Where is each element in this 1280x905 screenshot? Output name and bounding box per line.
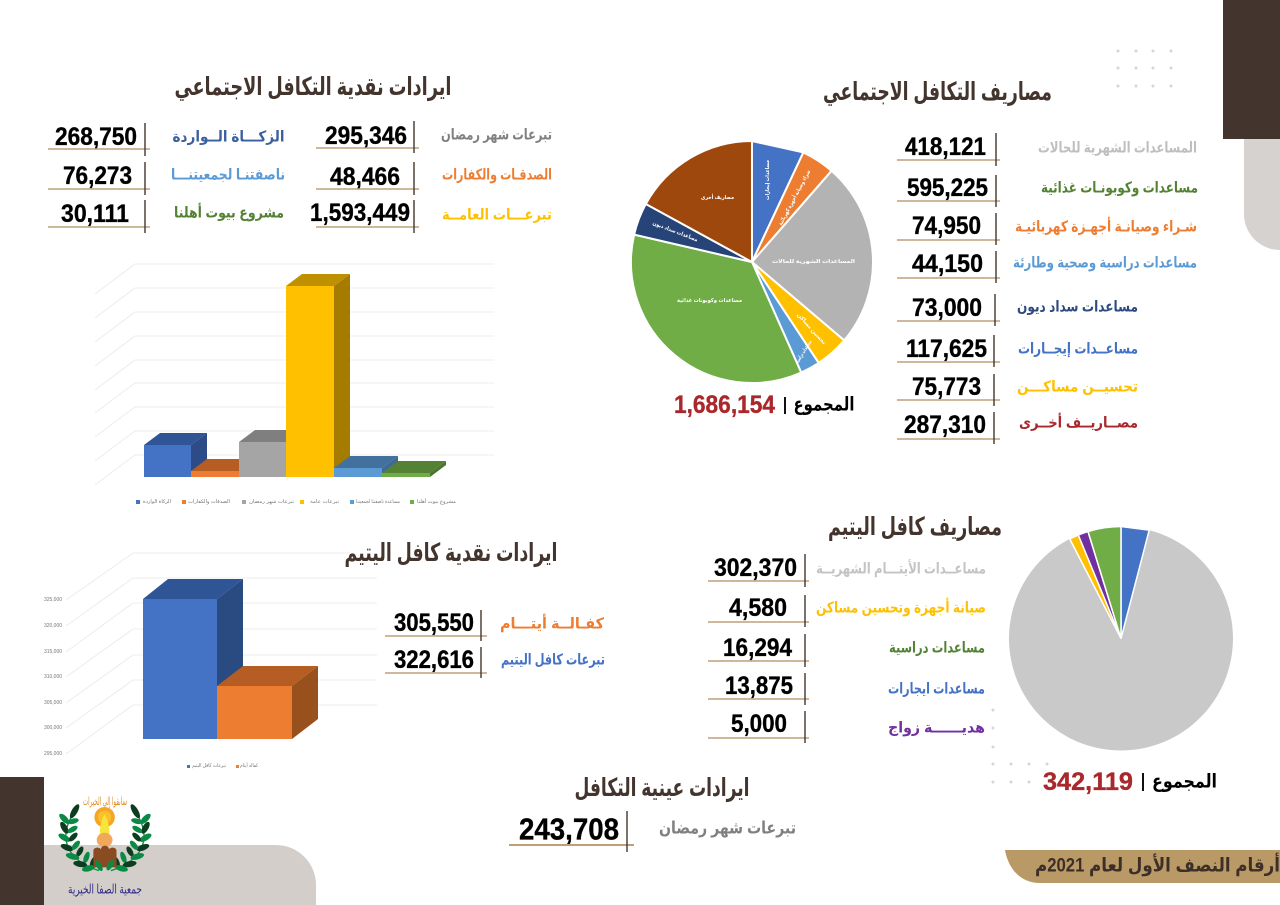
bar: charity: [191, 459, 255, 477]
row: buyut ahlana project: مشروع بيوت أهلنا: [174, 202, 284, 222]
corner decoration: top right: [1223, 0, 1280, 250]
row: ramadan in-kind donations: 243,708: [519, 812, 619, 846]
row: zakat: الزكـــاة الــواردة: [172, 128, 284, 146]
row: rent: 117,625: [906, 335, 987, 363]
bar: nasaftna: [334, 456, 398, 477]
row: monthly aid: المساعدات الشهرية للحالات: [1038, 140, 1197, 156]
pie chart: social solidarity expenses: [631, 141, 873, 383]
row: food aid: مساعدات وكوبونـات غذائية: [1041, 180, 1198, 196]
axis labels: 310,000: [44, 674, 62, 680]
row: debts: [897, 294, 1138, 326]
panel: orphan sponsorship cash revenue: [44, 539, 605, 769]
axis labels: 325,000: [44, 597, 62, 603]
row: appliances: [897, 212, 1197, 245]
pie chart: orphan sponsorship expenses: [1009, 526, 1233, 750]
chart legend: تبرعات عامة: [310, 499, 340, 505]
row: orphan donations: تبرعات كافل اليتيم: [501, 652, 605, 668]
row: marriage gift: [708, 710, 985, 743]
total: orphan sponsorship expenses: المجموع: [1152, 772, 1217, 792]
heading: social solidarity cash revenue: ايرادات نقدية التكافل الاجتماعي: [174, 73, 452, 102]
total: orphan sponsorship expenses: 342,119: [1043, 768, 1133, 796]
row: orphan monthly aid: 302,370: [714, 554, 797, 582]
row: nasaftna: [48, 162, 285, 195]
chart legend: كفالة أيتام: [240, 762, 259, 769]
row: ramadan donations: تبرعات شهر رمضان: [441, 126, 552, 144]
heading: orphan sponsorship cash revenue: ايرادات نقدية كافل اليتيم: [344, 539, 558, 568]
row: charity and expiations: [316, 162, 552, 195]
total: social solidarity expenses: [674, 391, 854, 419]
row: appliances: 74,950: [912, 212, 981, 240]
row: education aid: 16,294: [723, 634, 792, 662]
row: education and health: [897, 250, 1197, 283]
row: charity and expiations: الصدقـات والكفارات: [442, 166, 552, 184]
row: monthly aid: [897, 133, 1197, 166]
row: orphan sponsorship: كفـالــة أيتـــام: [500, 614, 604, 632]
row: ramadan in-kind donations: [509, 811, 796, 852]
row: housing: [897, 373, 1138, 406]
row: buyut ahlana project: [48, 200, 284, 233]
row: rent aid: مساعدات ايجارات: [888, 680, 985, 698]
row: nasaftna: ناصفتنـا لجمعيتنـــا: [171, 166, 285, 184]
row: other expenses: [897, 411, 1138, 444]
axis labels: 300,000: [44, 725, 62, 731]
row: general donations: [310, 199, 552, 233]
panel: social solidarity cash revenue: [48, 73, 552, 233]
row: rent aid: 13,875: [725, 672, 793, 700]
corner decoration: bottom left: [0, 777, 316, 905]
axis labels: 305,000: [44, 700, 62, 706]
axis labels: 295,000: [44, 751, 62, 757]
pie labels: شراء وصيانة أجهزة كهربائية: [776, 168, 812, 227]
bar: orphan sponsorship: [217, 666, 318, 739]
row: general donations: تبرعـــات العامــة: [442, 206, 552, 224]
row: orphan sponsorship: [385, 609, 604, 641]
panel: social solidarity expenses: [631, 78, 1198, 444]
logo: charity emblem: [57, 796, 153, 898]
chart legend: الصدقات والكفارات: [188, 499, 230, 505]
pie labels: مساعدات دراسية: [795, 339, 813, 365]
total: social solidarity expenses: 1,686,154: [674, 391, 775, 419]
row: education and health: 44,150: [912, 250, 983, 278]
chart legend: الزكاة الواردة: [143, 499, 171, 505]
row: ramadan in-kind donations: تبرعات شهر رمضان: [659, 818, 796, 838]
panel: in-kind revenue: [509, 774, 796, 852]
bar: ramadan: [239, 430, 302, 477]
chart legend: تبرعات كافل اليتيم: [192, 763, 227, 769]
row: debts: مساعدات سداد ديون: [1017, 298, 1138, 316]
pie labels: المساعدات الشهرية للحالات: [772, 259, 855, 265]
row: food aid: [897, 174, 1198, 207]
row: education aid: مساعدات دراسية: [889, 640, 985, 656]
heading: in-kind revenue: ايرادات عينية التكافل: [574, 774, 750, 803]
chart legend: تبرعات شهر رمضان: [249, 499, 295, 505]
bar: buyut ahlana: [382, 461, 446, 477]
axis labels: 320,000: [44, 623, 62, 629]
row: maintenance and housing: صيانة أجهزة وتحسين مساكن: [816, 598, 986, 616]
pie labels: تحسين مساكن: [795, 311, 827, 346]
dot grid: bottom: [992, 708, 1048, 784]
logo name: جمعية الصفا الخيرية: [68, 882, 142, 898]
row: ramadan donations: 295,346: [325, 122, 407, 150]
row: maintenance and housing: [708, 594, 986, 627]
row: housing: 75,773: [912, 373, 981, 401]
row: orphan donations: 322,616: [394, 646, 474, 674]
row: nasaftna: 76,273: [63, 162, 132, 190]
pie labels: [652, 160, 855, 365]
banner: first half 2021: [1005, 850, 1280, 883]
row: zakat: [48, 123, 284, 156]
row: appliances: شـراء وصيانـة أجهـزة كهربائيـة: [1015, 216, 1197, 236]
row: food aid: 595,225: [907, 174, 988, 202]
bar chart: orphan sponsorship: [44, 553, 377, 769]
row: education aid: [708, 634, 985, 667]
heading: orphan sponsorship expenses: مصاريف كافل اليتيم: [828, 513, 1002, 541]
total: social solidarity expenses: المجموع: [794, 394, 854, 416]
row: monthly aid: 418,121: [905, 133, 986, 161]
heading: social solidarity expenses: مصاريف التكافل الاجتماعي: [823, 78, 1052, 106]
chart legend: [187, 762, 259, 769]
pie labels: مساعدات إيجارات: [765, 160, 771, 200]
row: debts: 73,000: [912, 294, 982, 322]
chart legend: مساعدة ناصفتنا لجمعيتنا: [356, 499, 400, 505]
row: zakat: 268,750: [55, 123, 137, 151]
row: rent aid: [708, 672, 985, 705]
bar: general donations: [286, 274, 350, 477]
row: ramadan donations: [316, 121, 552, 153]
row: orphan donations: [385, 646, 605, 678]
axis labels: 315,000: [44, 649, 62, 655]
pie labels: مصاريف أخرى: [701, 193, 734, 201]
row: rent: [897, 335, 1138, 367]
total: orphan sponsorship expenses: [1043, 768, 1217, 796]
row: marriage gift: 5,000: [731, 710, 787, 738]
pie labels: مساعدات سداد ديون: [652, 221, 698, 243]
chart legend: [136, 498, 456, 505]
logo wreath: [57, 803, 153, 873]
row: other expenses: مصــاريــف أخــرى: [1019, 412, 1138, 432]
pie labels: مساعدات وكوبونات غذائية: [677, 297, 742, 304]
dot grid: top right: [1116, 50, 1172, 88]
row: education and health: مساعدات دراسية وصحية وطارئة: [1013, 254, 1197, 272]
row: general donations: 1,593,449: [310, 199, 410, 227]
logo motto: سابقوا إلى الخيرات: [83, 796, 127, 808]
row: maintenance and housing: 4,580: [729, 594, 787, 622]
bar: zakat: [144, 433, 207, 477]
row: charity and expiations: 48,466: [330, 163, 400, 191]
bar: orphan donations: [143, 579, 243, 739]
row: marriage gift: هديــــــة زواج: [888, 720, 985, 736]
row: orphan monthly aid: [708, 554, 986, 587]
row: orphan monthly aid: مساعــدات الأيتـــام الشهريــة: [816, 560, 986, 578]
row: other expenses: 287,310: [904, 411, 986, 439]
bar chart: social solidarity cash revenue: [95, 264, 494, 505]
row: rent: مساعــدات إيجــارات: [1018, 340, 1138, 358]
chart legend: مشروع بيوت أهلنا: [417, 498, 456, 505]
row: housing: تحسيــن مساكـــن: [1017, 378, 1138, 396]
axis labels: [44, 597, 62, 757]
row: orphan sponsorship: 305,550: [394, 609, 474, 637]
row: buyut ahlana project: 30,111: [61, 200, 129, 228]
panel: orphan sponsorship expenses: [708, 513, 1233, 796]
